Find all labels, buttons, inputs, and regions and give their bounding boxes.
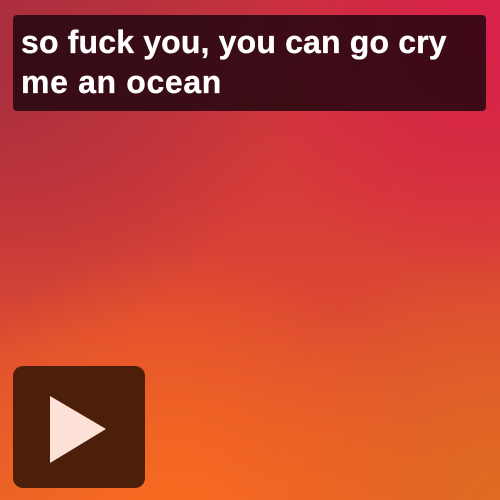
icon: play triangle: [50, 396, 106, 463]
panel: play button: [13, 366, 145, 488]
panel: lyric caption: [13, 15, 486, 111]
text: lyric line: so fuck you, you can go cry: [21, 24, 447, 60]
text: lyric line: me an ocean: [21, 64, 222, 100]
text: lyric line: [21, 24, 447, 100]
